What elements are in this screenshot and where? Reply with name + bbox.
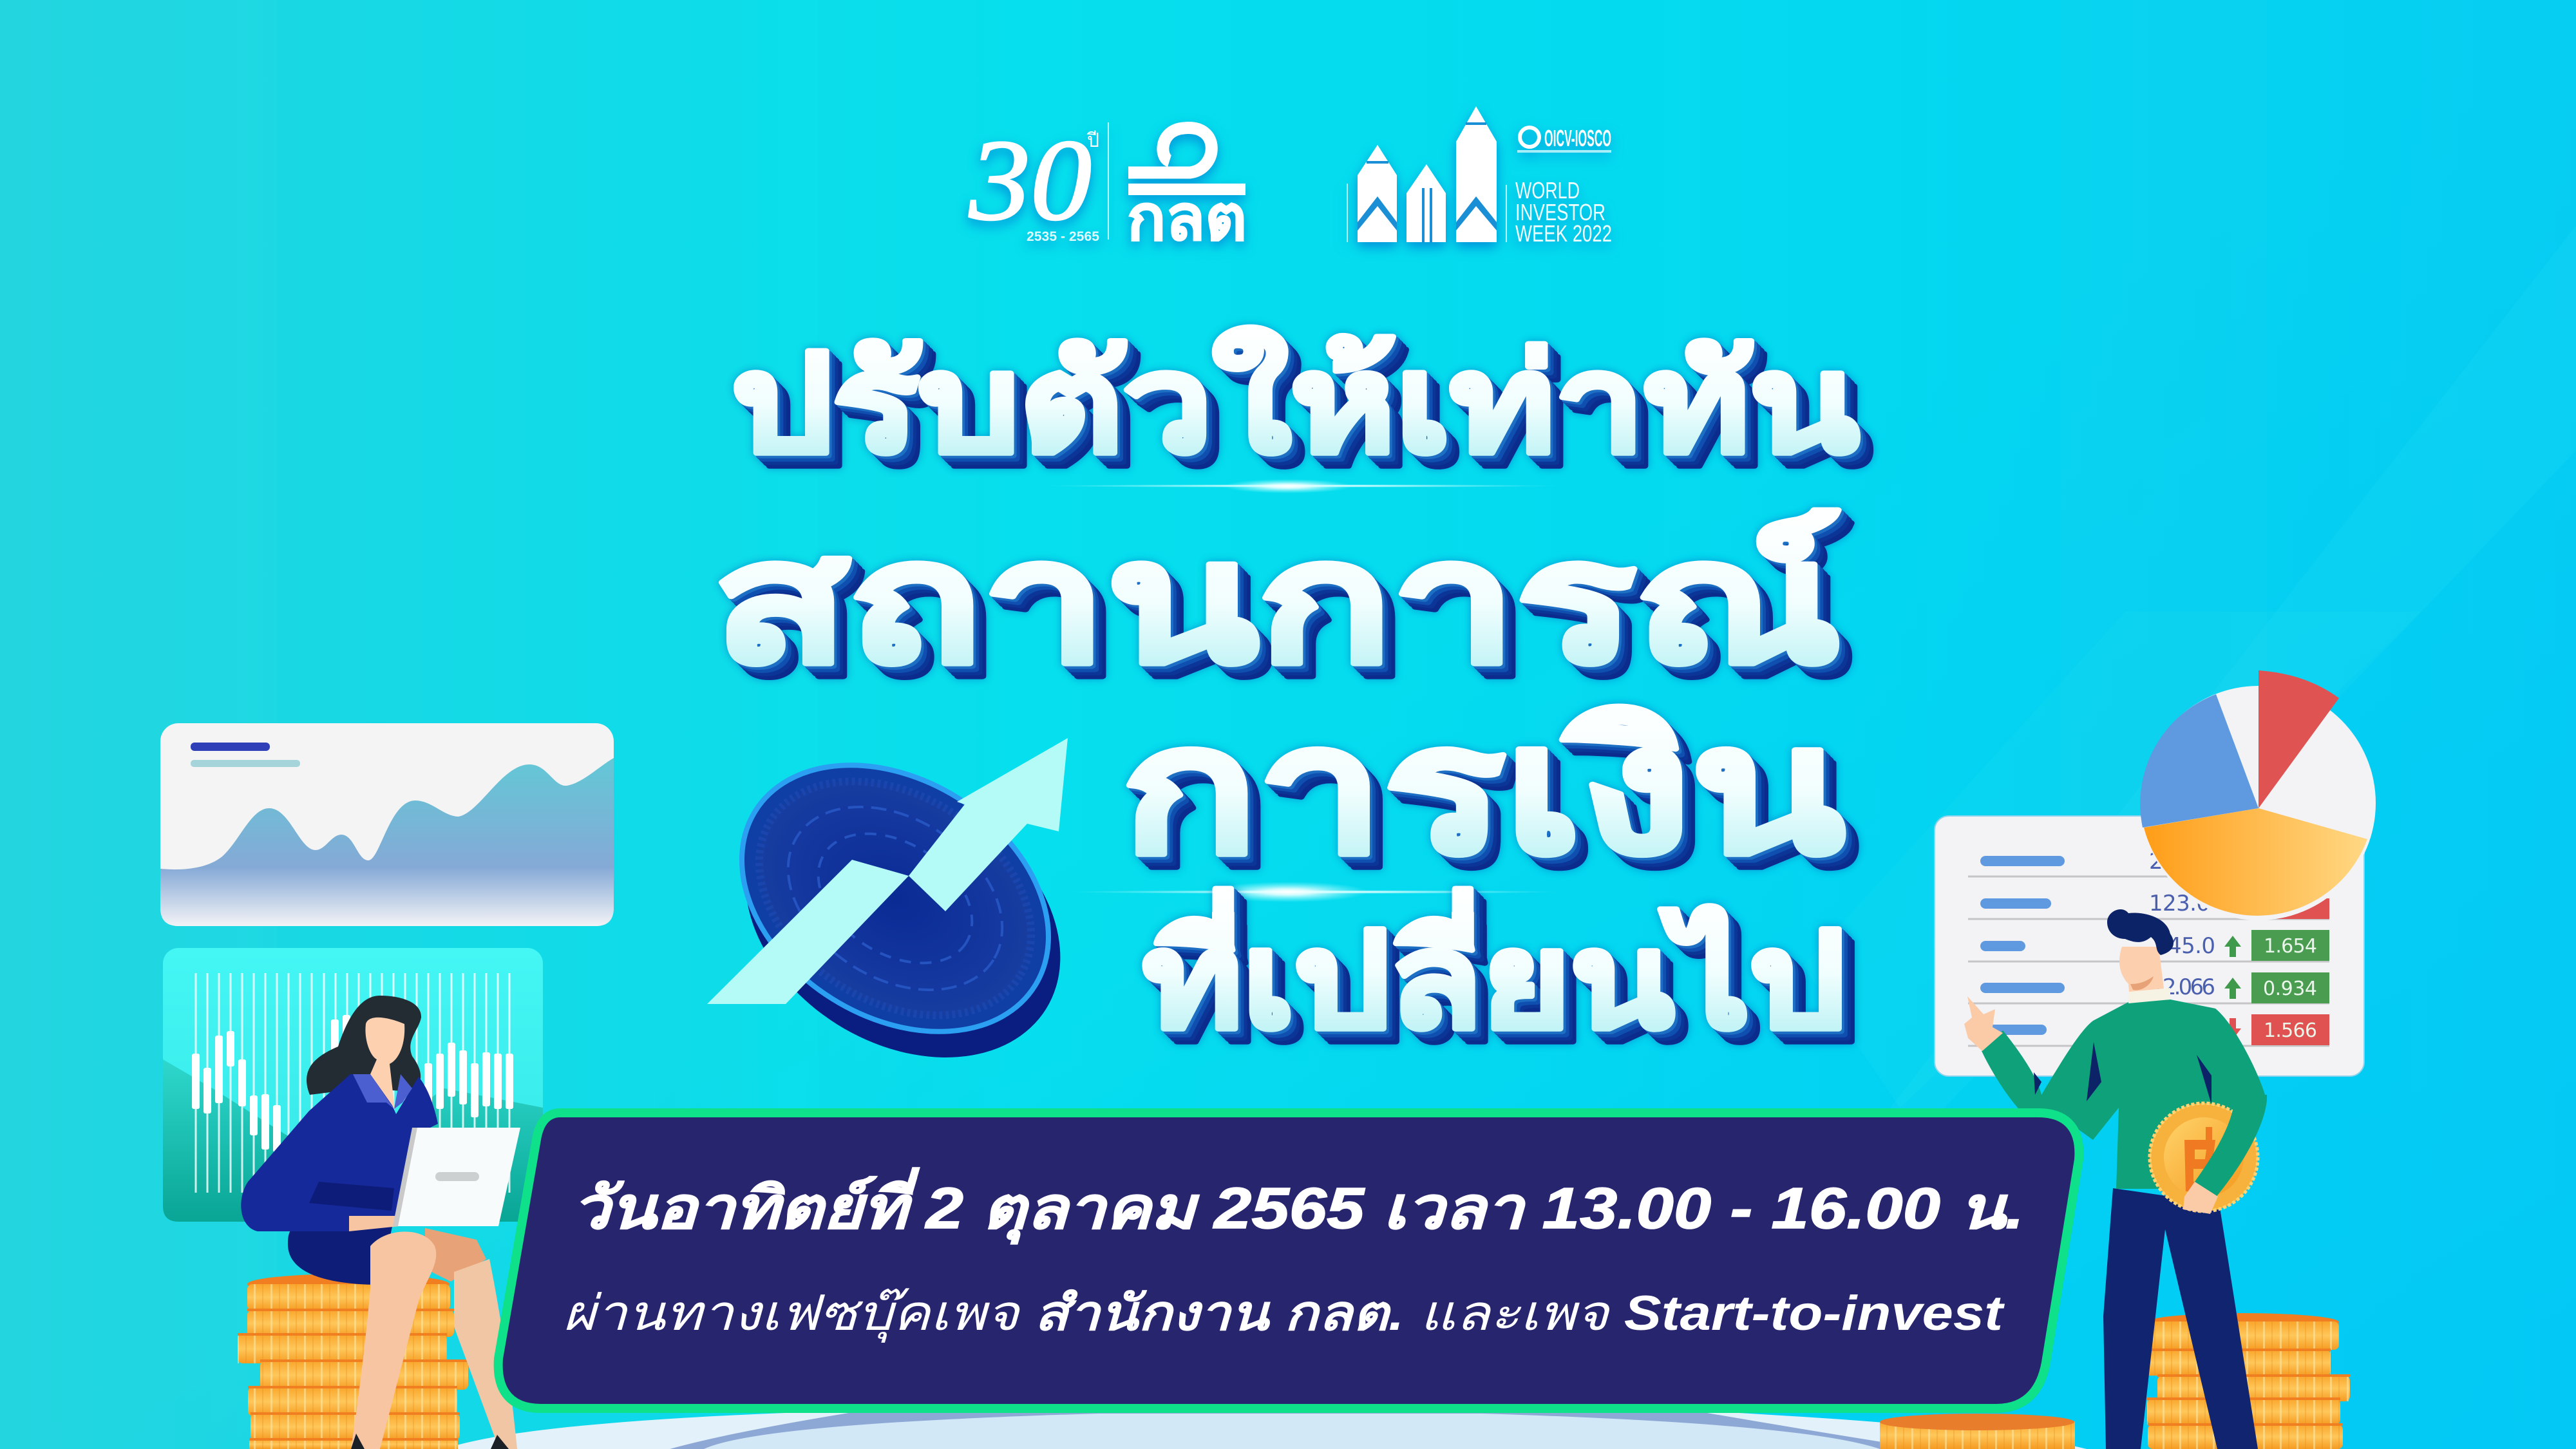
pie chart [2140, 670, 2376, 920]
logo divider [1108, 122, 1109, 240]
change values [2251, 898, 2329, 1045]
gold coin [2150, 1103, 2258, 1211]
coin stack: centre [1880, 1414, 2075, 1449]
tower 3 [1456, 106, 1497, 242]
logo: SEC Thailand 30 years [969, 116, 1247, 253]
panel body with green border [503, 1117, 2074, 1404]
neck and face [365, 1018, 404, 1109]
face and neck [2119, 947, 2164, 992]
hand holding coin [2183, 1182, 2218, 1214]
figure: man with coin [1964, 909, 2267, 1449]
change values: 1.654 [2264, 935, 2317, 958]
rising arrow [707, 738, 1068, 1004]
jacket [241, 1074, 438, 1231]
price values: 2 [2149, 849, 2163, 875]
blue slice [2140, 694, 2259, 828]
OICV-IOSCO emblem [1520, 128, 1539, 147]
disc side [694, 725, 1112, 1114]
row rules [1968, 876, 2329, 1046]
back thigh [425, 1228, 486, 1282]
title line 3: การเงิน [1122, 692, 1845, 889]
light streak 2 [1069, 882, 1558, 902]
sweater [1982, 999, 2267, 1189]
icon: coin disc with rising arrow [692, 710, 1112, 1114]
chart title bars [191, 743, 300, 767]
tower 1 [1358, 145, 1397, 242]
panel: event details [503, 1117, 2074, 1404]
forearm [2195, 1095, 2267, 1198]
beard shade [2130, 976, 2154, 990]
panel lower shade [163, 1059, 543, 1222]
shoes [351, 1434, 509, 1449]
sweater shadows [2034, 1042, 2211, 1104]
skirt [288, 1191, 396, 1285]
event name: WORLD [1515, 177, 1580, 204]
hair [2107, 909, 2174, 955]
price values: 123.0 [2149, 891, 2210, 916]
jacket waist [309, 1182, 394, 1211]
divider lines [1347, 184, 1506, 242]
red slice [2259, 670, 2339, 808]
figure: woman with laptop [241, 996, 520, 1449]
orange slice [2144, 808, 2367, 916]
year superscript: ปี [1086, 130, 1099, 151]
price values: 145.0 [2154, 933, 2215, 959]
title line 1: ปรับตัวให้เท่าทัน [732, 327, 1859, 480]
change values: 1.566 [2264, 1019, 2317, 1042]
stage platform [444, 1409, 2087, 1449]
change values: 0.934 [2263, 978, 2317, 1000]
broadcast channels: ผ่านทางเฟซบุ๊คเพจ สำนักงาน กลต. และเพจ Start-to-invest [563, 1286, 2005, 1343]
title line 2: สถานการณ์ [714, 508, 1841, 697]
panel: area chart [160, 723, 614, 926]
title line 4: ที่เปลี่ยนไป [1143, 888, 1845, 1055]
collar [2128, 988, 2170, 1003]
row labels [1980, 856, 2065, 1035]
disc face [692, 710, 1098, 1086]
small emblem caption [1517, 150, 1611, 153]
trend arrows [2224, 936, 2241, 1039]
pointing hand [1964, 996, 2003, 1051]
poster canvas: OICV-IOSCO [1544, 125, 1611, 151]
area series [160, 758, 614, 926]
year range: 2535 - 2565 [1027, 229, 1099, 244]
tower 2 [1406, 164, 1446, 242]
hands [349, 1216, 399, 1231]
thirtieth anniversary numerals: 30 [969, 116, 1092, 244]
trousers [2103, 1188, 2258, 1449]
coin stack: left [238, 1274, 468, 1449]
collar [353, 1074, 412, 1109]
event name [1515, 177, 1612, 247]
candlestick wicks [196, 973, 509, 1193]
price values: 12.066 [2151, 974, 2215, 1000]
hair [307, 996, 421, 1095]
light streak 1 [1043, 479, 1558, 493]
date and time: วันอาทิตย์ที่ 2 ตุลาคม 2565 เวลา 13.00 - 16.00 น. [572, 1168, 2024, 1244]
coin stack: right [2144, 1313, 2350, 1449]
panel: candlestick chart [163, 948, 543, 1222]
swirl mark [1128, 128, 1211, 173]
laptop [393, 1128, 520, 1226]
panel: price table [1935, 816, 2364, 1076]
back shin [454, 1259, 517, 1449]
price values [2149, 849, 2215, 1000]
mark bar [1128, 184, 1245, 195]
front leg [351, 1231, 436, 1449]
logo: World Investor Week 2022 [1347, 106, 1612, 247]
event name: WEEK 2022 [1515, 220, 1612, 247]
event name: INVESTOR [1515, 199, 1605, 225]
SEC wordmark: กลต [1127, 182, 1247, 253]
candlestick bodies [192, 1015, 513, 1152]
